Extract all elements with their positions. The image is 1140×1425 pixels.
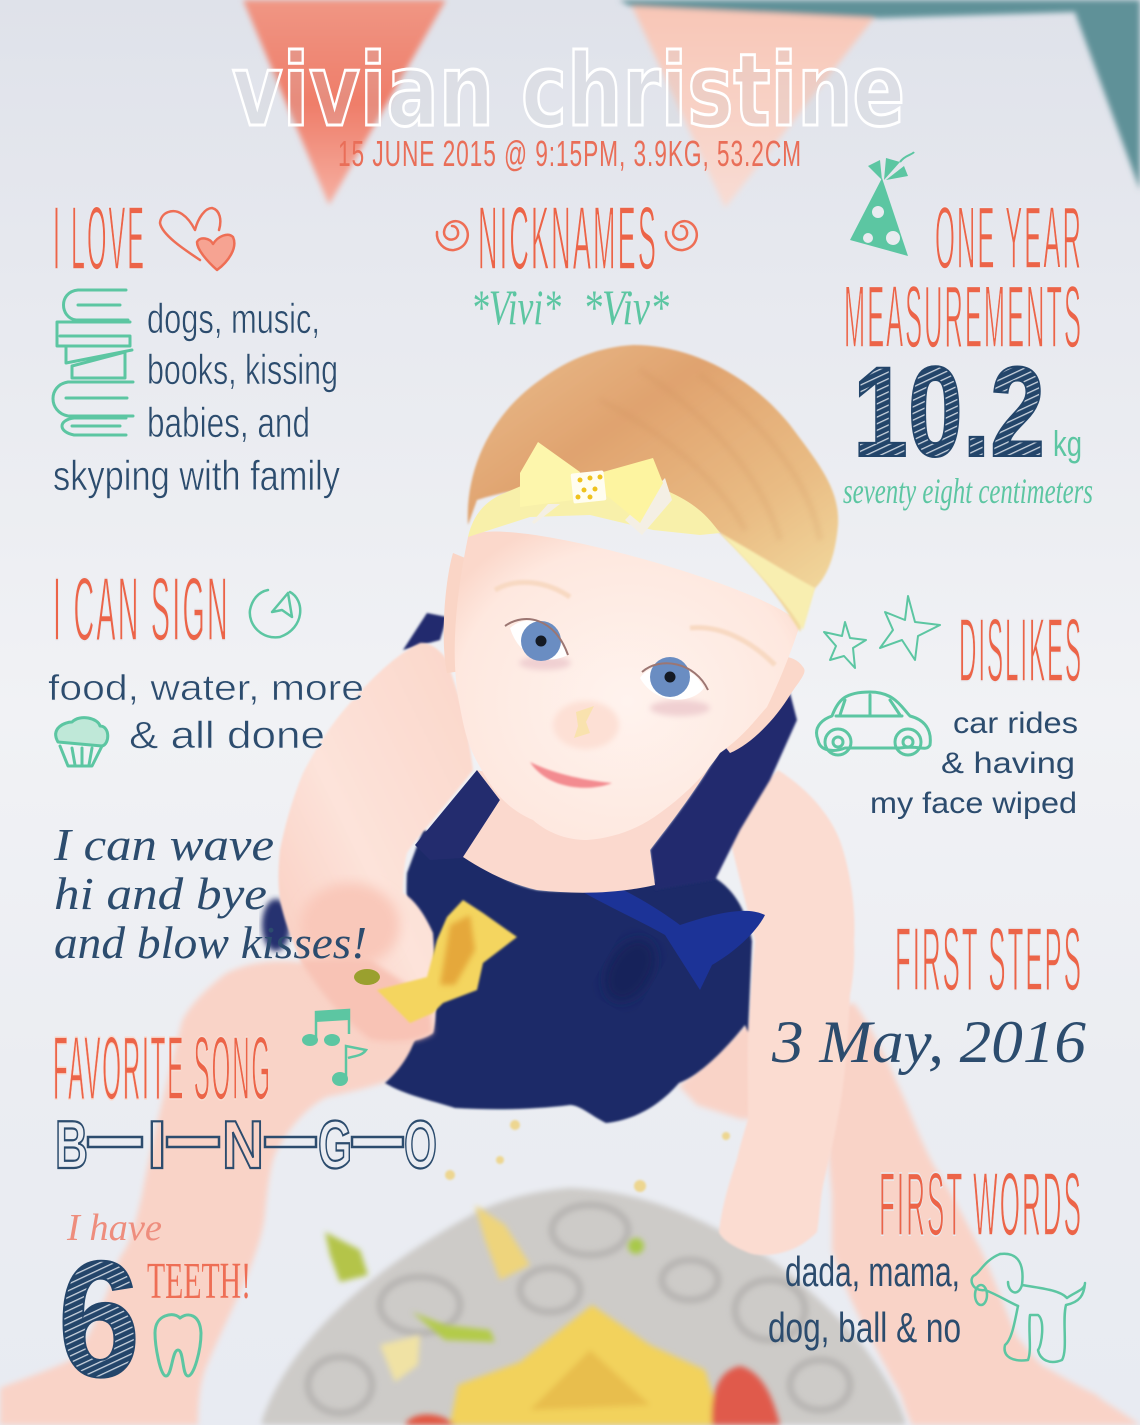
text: signs: food, water, more <box>48 667 364 708</box>
icon: muffin <box>56 718 108 766</box>
head <box>444 345 838 840</box>
text: loves: dogs, music, <box>147 295 320 342</box>
hand and cake <box>300 883 517 1042</box>
unit: kg: kg <box>1053 423 1082 464</box>
text: loves: books, kissing <box>147 346 338 393</box>
icon: books <box>53 290 133 435</box>
nose with cake <box>553 701 619 749</box>
right eye <box>640 657 708 700</box>
panel: I love: I LOVE <box>53 189 146 289</box>
under-eye shade <box>519 656 710 716</box>
text: loves: skyping with family <box>53 452 340 499</box>
heading: teeth: TEETH! <box>147 1253 251 1310</box>
panel: nicknames <box>437 189 697 335</box>
icon: hearts <box>160 208 234 270</box>
face <box>455 532 800 840</box>
hair streaks <box>600 370 820 540</box>
right arm <box>719 770 855 1255</box>
right ear <box>720 657 805 753</box>
panel: I can sign <box>48 560 364 766</box>
text: date: 3 May, 2016 <box>771 1009 1086 1075</box>
headband right <box>720 533 815 630</box>
text: signs: & all done <box>129 715 325 757</box>
plate and food <box>262 1120 905 1425</box>
baby photo illustration <box>0 345 1140 1425</box>
left lace strap <box>415 770 500 860</box>
chest <box>463 750 720 893</box>
mouth <box>530 762 612 788</box>
infographic canvas: FAVORITE SONG <box>53 1019 272 1119</box>
romper <box>262 613 797 1123</box>
text: bingo: B <box>55 1107 88 1183</box>
panel: I love <box>53 189 340 499</box>
panel: I can sign: I CAN SIGN <box>53 560 230 660</box>
icon: right spiral <box>666 221 697 250</box>
icon: party hat <box>850 152 914 256</box>
text: words: dada, mama, <box>785 1248 960 1295</box>
left ear <box>444 553 470 673</box>
icon: stars <box>824 596 940 668</box>
text: dislikes: car rides <box>953 707 1078 740</box>
text: nicknames list <box>471 279 669 335</box>
text: wave and kisses: hi and bye <box>54 868 267 919</box>
panel: favorite song <box>53 1010 437 1183</box>
stat: weight: 10.2 <box>853 341 1045 484</box>
text: nicknames list: *Viv* <box>583 279 669 335</box>
text: wave and kisses: I can wave <box>53 819 274 870</box>
title: vivian christine <box>232 32 905 149</box>
bow <box>520 442 672 535</box>
text: bingo: N <box>222 1107 264 1183</box>
text: dislikes: my face wiped <box>870 787 1077 820</box>
text: wave and kisses <box>53 819 367 968</box>
text: words <box>768 1248 961 1351</box>
birth details: 15 JUNE 2015 @ 9:15PM, 3.9KG, 53.2CM <box>338 133 802 174</box>
icon: music notes <box>302 1010 366 1086</box>
icon: left spiral <box>437 221 468 250</box>
icon: sign swirl <box>250 590 300 637</box>
left eye <box>505 619 568 661</box>
infographic canvas: NICKNAMES <box>478 189 658 289</box>
hair <box>468 345 838 632</box>
text: dislikes <box>870 707 1078 820</box>
bow ribbon <box>535 860 765 990</box>
text: dislikes: & having <box>941 747 1075 780</box>
panel: first words <box>768 1155 1085 1362</box>
romper frill behind arm <box>262 899 290 951</box>
text: loves <box>53 295 340 499</box>
text: I have: I have <box>66 1207 162 1249</box>
text: signs <box>48 667 364 757</box>
crumbs <box>445 1120 730 1192</box>
text: bingo <box>55 1107 437 1183</box>
text: loves: babies, and <box>147 399 310 446</box>
legs <box>0 961 1140 1425</box>
stat: six: 6 <box>58 1227 140 1411</box>
shoulder lace <box>403 613 447 650</box>
left arm <box>278 643 473 1042</box>
icon: dog <box>972 1254 1085 1362</box>
panel: one year measurements <box>843 152 1093 511</box>
text: bingo: G <box>318 1107 352 1183</box>
text: bingo: O <box>404 1107 437 1183</box>
right lace strap <box>650 693 797 890</box>
icon: tooth <box>155 1315 201 1376</box>
panel: teeth <box>58 1207 251 1411</box>
icon: car <box>817 692 930 755</box>
brows <box>495 582 775 665</box>
panel: dislikes <box>817 596 1083 820</box>
left leg <box>0 961 425 1425</box>
panel: first steps <box>771 910 1086 1075</box>
text: nicknames list: *Vivi* <box>471 279 561 335</box>
text: bingo: I <box>147 1107 167 1183</box>
right leg <box>679 1003 1140 1425</box>
bunting flags <box>243 0 1140 208</box>
text: wave and kisses: and blow kisses! <box>54 917 367 968</box>
headband <box>468 480 720 537</box>
text: words: dog, ball & no <box>768 1304 961 1351</box>
